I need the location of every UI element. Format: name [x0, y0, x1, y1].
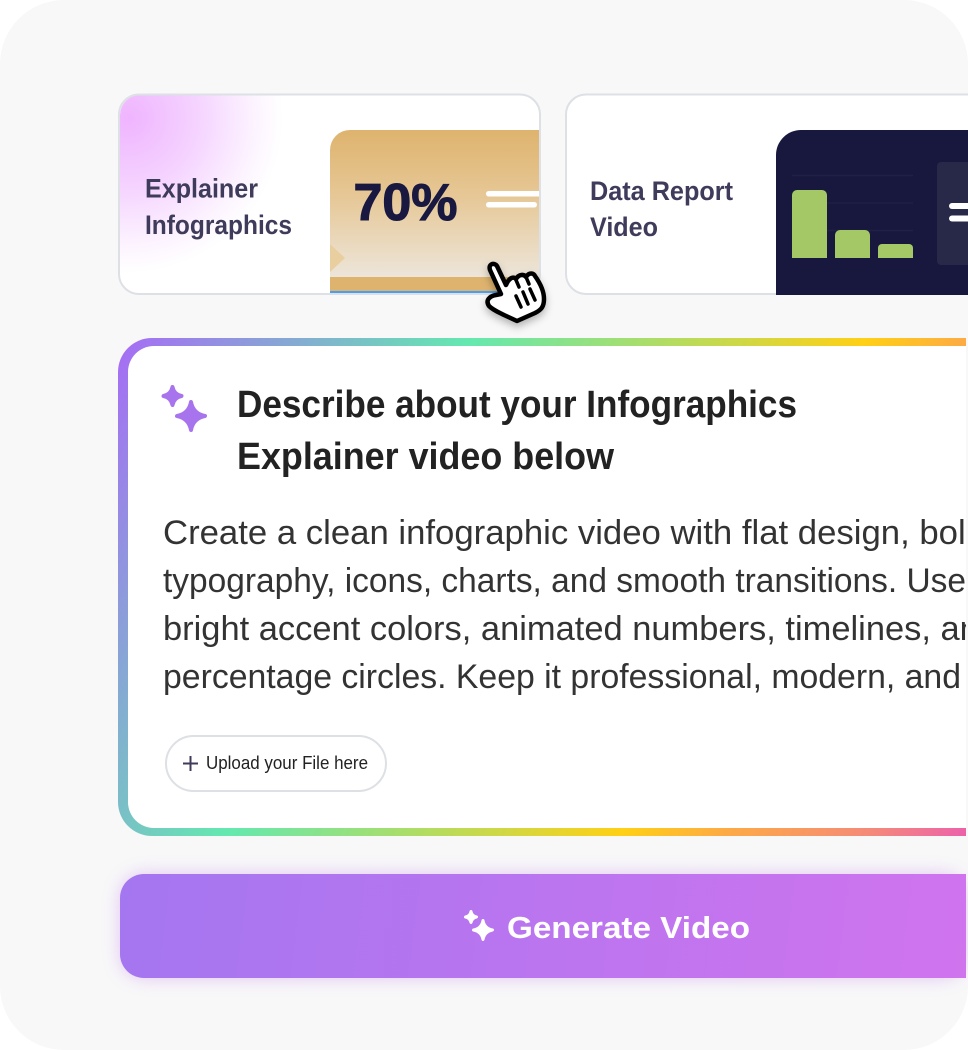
- panel: explainer infographics card: [119, 94, 546, 294]
- heading: describe prompt: Explainer video below: [237, 436, 614, 478]
- panel: prompt box with gradient border: [118, 338, 968, 836]
- text block: prompt description: typography, icons, charts, and smooth transitions. Use: [163, 562, 966, 600]
- text block: prompt description: percentage circles. Keep it professional, modern, and: [163, 658, 961, 696]
- panel: data report video card: [566, 94, 968, 295]
- card label: Data Report Video: Data Report: [590, 176, 733, 206]
- button: upload file pill: [166, 736, 386, 791]
- text block: prompt description: Create a clean infographic video with flat design, bold: [163, 514, 968, 552]
- text block: prompt description: bright accent colors, animated numbers, timelines, and: [163, 610, 968, 648]
- button label: Generate Video: [507, 910, 750, 945]
- icon: purple sparkles: [164, 387, 205, 430]
- card label: Explainer Infographics: Infographics: [145, 210, 292, 240]
- thumbnail: gold percentage slide: 70%: [354, 174, 458, 232]
- icon: white sparkles: [466, 912, 492, 940]
- card label: Explainer Infographics: Explainer: [145, 174, 258, 204]
- button: upload file pill: Upload your File here: [206, 753, 368, 773]
- icon: plus: [183, 756, 198, 771]
- thumbnail: dark bar chart slide: [776, 130, 968, 295]
- icon: hand pointer cursor: [488, 264, 544, 321]
- button: generate video: [120, 874, 968, 978]
- card label: Data Report Video: Video: [590, 212, 658, 242]
- thumbnail: gold percentage slide: [330, 130, 546, 293]
- heading: describe prompt: Describe about your Infographics: [237, 384, 797, 426]
